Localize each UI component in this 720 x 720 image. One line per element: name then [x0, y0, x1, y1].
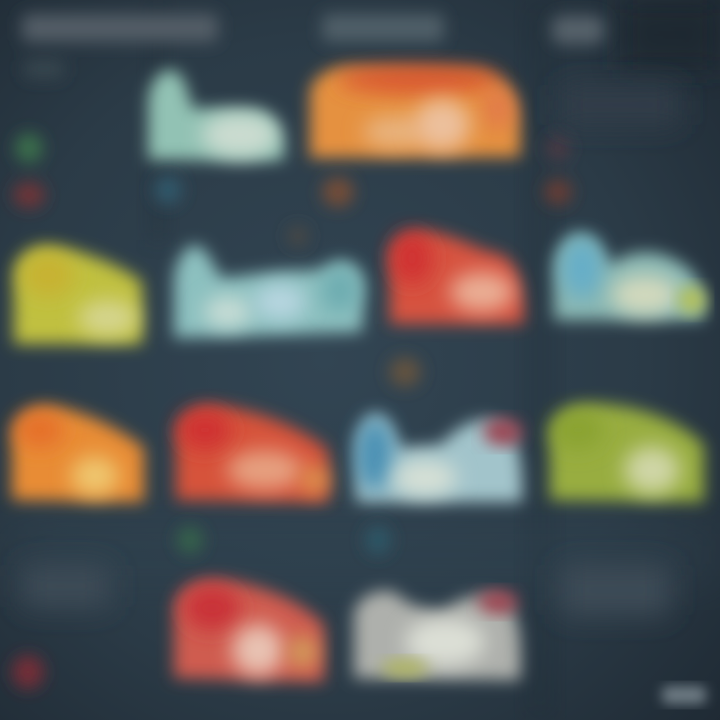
blurred text blocks	[22, 85, 680, 615]
small status markers	[12, 133, 572, 689]
panel: yellow chart, row 2	[14, 246, 142, 344]
panel: green chart, row 3	[550, 404, 704, 502]
panel: mint chart, row 1	[148, 70, 284, 160]
panel: orange chart, row 1	[310, 66, 520, 158]
panel: blue chart, row 3	[356, 414, 523, 502]
panel: grey chart, row 4	[354, 590, 521, 680]
panel: red chart, row 2	[390, 232, 524, 324]
panel: red chart, row 3	[176, 406, 329, 502]
panel: teal chart, row 2	[174, 245, 364, 338]
heading bars	[22, 14, 604, 78]
panel: red chart, row 4	[174, 580, 324, 682]
panel: orange chart, row 3	[12, 406, 144, 502]
corner badge	[662, 686, 706, 704]
panel: blue chart, row 2	[554, 234, 706, 320]
